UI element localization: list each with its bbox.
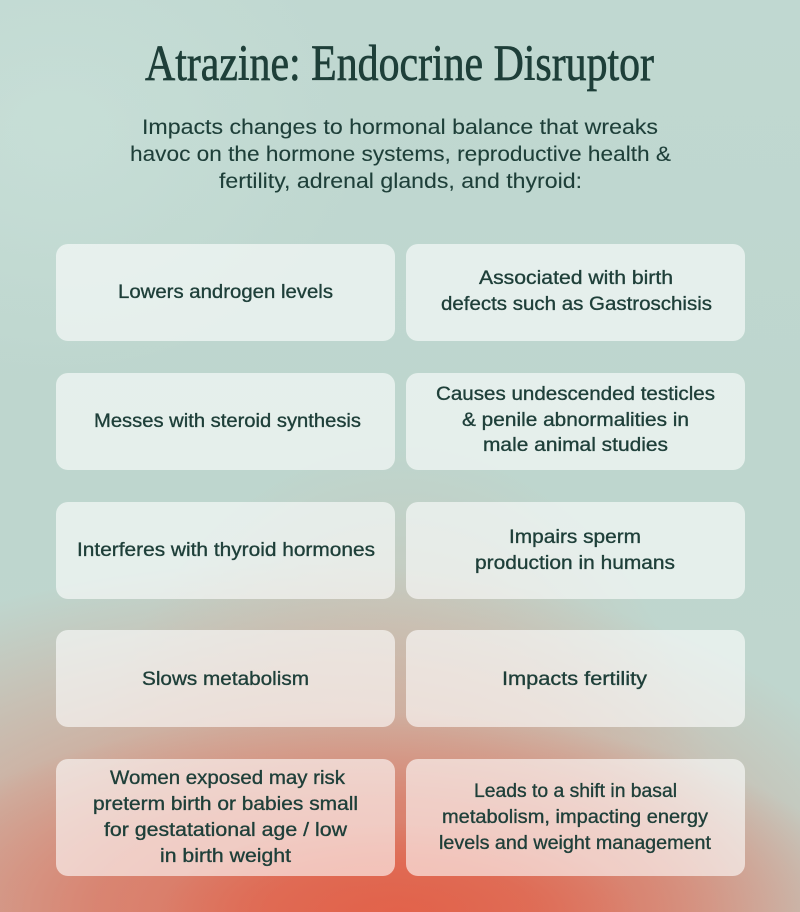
panel: preterm birth risk: preterm birth or babies small bbox=[93, 793, 358, 815]
panel: impacts fertility bbox=[406, 630, 745, 727]
panel: preterm birth risk: for gestatational age / low bbox=[104, 819, 348, 841]
panel: birth defects bbox=[406, 244, 745, 341]
panel: male animal studies: male animal studies bbox=[483, 434, 668, 456]
panel: basal metabolism: levels and weight management bbox=[439, 832, 712, 854]
intro text: Impacts changes to hormonal balance that wreaks bbox=[142, 116, 658, 139]
intro text: fertility, adrenal glands, and thyroid: bbox=[219, 170, 582, 193]
title: Atrazine: Endocrine Disruptor bbox=[145, 36, 654, 92]
panel: slows metabolism bbox=[56, 630, 395, 727]
panel: preterm birth risk: Women exposed may risk bbox=[110, 767, 345, 789]
panel: lowers androgen levels bbox=[56, 244, 395, 341]
panel: birth defects: Associated with birth bbox=[479, 267, 673, 289]
panel: male animal studies bbox=[406, 373, 745, 470]
panel: sperm production bbox=[406, 502, 745, 599]
panel: sperm production: production in humans bbox=[475, 552, 675, 574]
panel: impacts fertility: Impacts fertility bbox=[502, 668, 647, 690]
panel: male animal studies: & penile abnormalities in bbox=[462, 409, 689, 431]
panel: male animal studies: Causes undescended testicles bbox=[436, 383, 715, 405]
intro text bbox=[130, 116, 671, 193]
panel: thyroid hormones: Interferes with thyroid hormones bbox=[77, 539, 375, 561]
panel: basal metabolism: metabolism, impacting energy bbox=[442, 806, 708, 828]
panel: lowers androgen levels: Lowers androgen levels bbox=[118, 281, 333, 303]
panel: basal metabolism bbox=[406, 759, 745, 876]
panel: slows metabolism: Slows metabolism bbox=[142, 668, 309, 690]
panel: birth defects: defects such as Gastroschisis bbox=[441, 293, 712, 315]
panel: preterm birth risk: in birth weight bbox=[160, 845, 292, 867]
intro text: havoc on the hormone systems, reproductive health & bbox=[130, 143, 671, 166]
panel: steroid synthesis: Messes with steroid synthesis bbox=[94, 410, 361, 432]
panel: preterm birth risk bbox=[56, 759, 395, 876]
panel: basal metabolism: Leads to a shift in basal bbox=[474, 780, 677, 802]
panel: sperm production: Impairs sperm bbox=[509, 526, 641, 548]
panel: steroid synthesis bbox=[56, 373, 395, 470]
panel: thyroid hormones bbox=[56, 502, 395, 599]
